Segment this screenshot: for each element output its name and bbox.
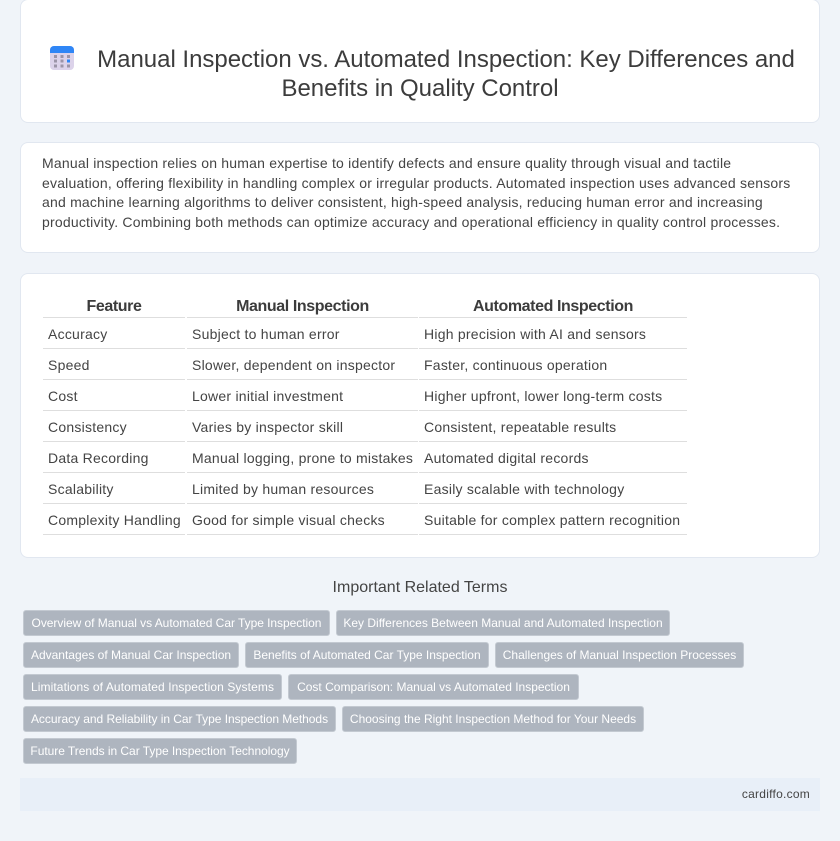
text block: summary: productivity. Combining both methods can optimize accuracy and operational efficiency in quality control processes. xyxy=(42,214,780,230)
header: Automated Inspection: Automated Inspection xyxy=(473,298,633,315)
text block: summary xyxy=(42,155,790,230)
title: Manual Inspection vs. Automated Inspection: Key Differences and xyxy=(97,46,795,73)
panel: intro text xyxy=(20,142,820,253)
table: comparison: High precision with AI and sensors xyxy=(424,326,646,342)
panel: related term tags: Advantages of Manual Car Inspection xyxy=(31,648,231,662)
icon: calendar xyxy=(50,46,74,70)
header: Feature: Feature xyxy=(86,298,142,315)
panel: related term tags xyxy=(23,610,744,764)
table: comparison: Varies by inspector skill xyxy=(192,419,343,435)
panel: related term tags: Challenges of Manual Inspection Processes xyxy=(503,648,736,662)
table: comparison: Limited by human resources xyxy=(192,481,374,497)
panel: title card xyxy=(20,0,820,123)
table: comparison: Suitable for complex pattern recognition xyxy=(424,512,680,528)
table: comparison: Lower initial investment xyxy=(192,388,343,404)
panel: related term tags: Key Differences Between Manual and Automated Inspection xyxy=(343,616,663,630)
text block: summary: and machine learning algorithms to deliver consistent, high-speed analysis, reducing human error and increasing xyxy=(42,194,763,210)
table: comparison: Accuracy xyxy=(48,326,108,342)
table: comparison: Easily scalable with technology xyxy=(424,481,624,497)
text block: summary: evaluation, offering flexibility in handling complex or irregular products. Automated inspection uses advanced sensors xyxy=(42,174,790,190)
table: comparison: Scalability xyxy=(48,481,114,497)
table: comparison: Consistent, repeatable results xyxy=(424,419,616,435)
table: comparison: Good for simple visual checks xyxy=(192,512,385,528)
table: comparison: Subject to human error xyxy=(192,326,340,342)
panel: comparison table xyxy=(20,273,820,558)
title: Benefits in Quality Control xyxy=(281,75,559,102)
table: comparison: Higher upfront, lower long-term costs xyxy=(424,388,662,404)
table: comparison xyxy=(43,298,687,535)
table: comparison: Cost xyxy=(48,388,78,404)
footer: site name: cardiffo.com xyxy=(742,787,810,801)
panel: related term tags: Choosing the Right Inspection Method for Your Needs xyxy=(350,712,636,726)
panel: related term tags: Overview of Manual vs Automated Car Type Inspection xyxy=(32,616,321,630)
footer bar xyxy=(20,778,820,811)
table: comparison: Faster, continuous operation xyxy=(424,357,607,373)
panel: related term tags: Benefits of Automated Car Type Inspection xyxy=(253,648,481,662)
panel: related term tags: Limitations of Automated Inspection Systems xyxy=(31,680,274,694)
table: comparison: Automated digital records xyxy=(424,450,589,466)
table: comparison: Speed xyxy=(48,357,90,373)
text block: summary: Manual inspection relies on human expertise to identify defects and ensure quality through visual and tactile xyxy=(42,155,731,171)
table: comparison: Manual logging, prone to mistakes xyxy=(192,450,413,466)
table: comparison: Slower, dependent on inspector xyxy=(192,357,395,373)
header: Manual Inspection: Manual Inspection xyxy=(236,298,369,315)
panel: related term tags: Future Trends in Car Type Inspection Technology xyxy=(30,744,290,758)
title xyxy=(97,46,795,102)
heading: related terms: Important Related Terms xyxy=(333,579,507,596)
panel: related term tags: Cost Comparison: Manual vs Automated Inspection xyxy=(297,680,570,694)
table: comparison: Data Recording xyxy=(48,450,149,466)
table: comparison: Consistency xyxy=(48,419,127,435)
table: comparison: Complexity Handling xyxy=(48,512,181,528)
panel: related term tags: Accuracy and Reliability in Car Type Inspection Methods xyxy=(31,712,328,726)
